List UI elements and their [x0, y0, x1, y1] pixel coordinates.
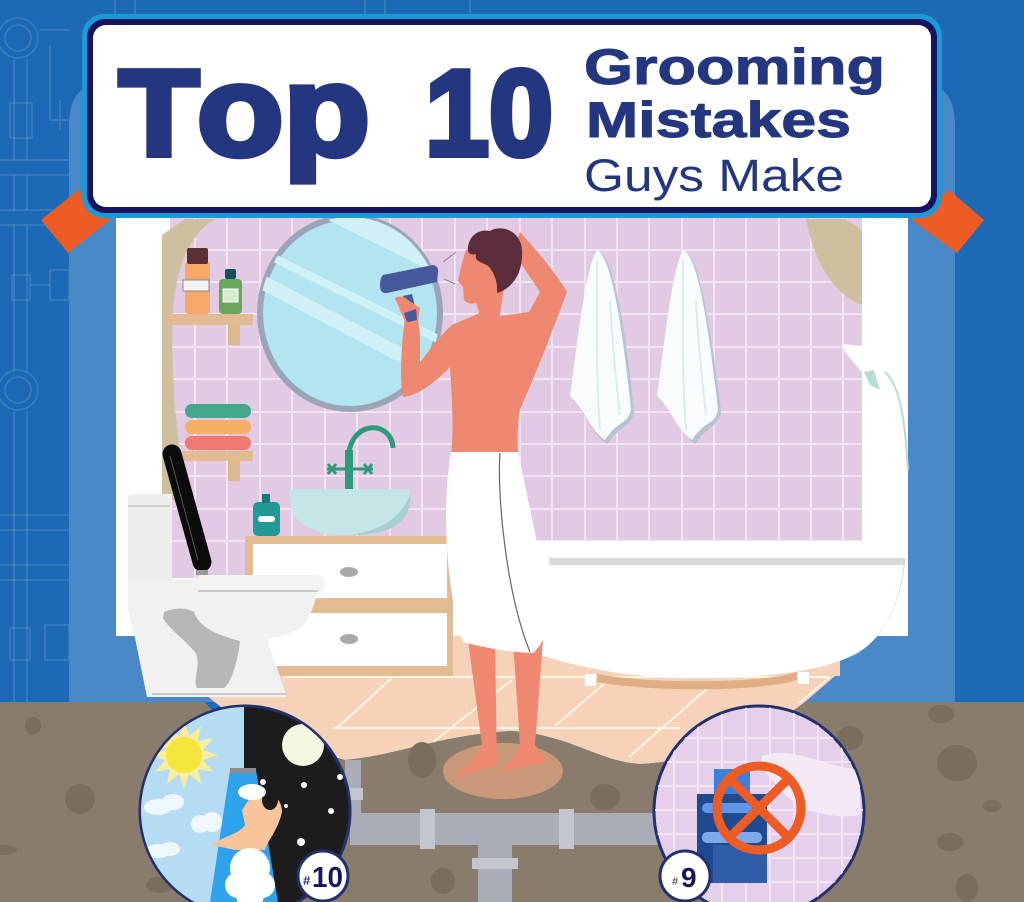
tiled wall	[170, 215, 862, 580]
icon: prohibited sign	[717, 766, 801, 850]
sink and faucet	[290, 428, 410, 535]
bath mat	[443, 743, 563, 799]
floor tile lines	[283, 677, 830, 757]
legs	[452, 640, 548, 778]
title: top 10: op	[197, 40, 370, 183]
man with hair dryer	[380, 228, 567, 799]
shower figure	[210, 768, 282, 902]
icon: moon	[282, 724, 324, 766]
torso and arms	[401, 232, 567, 455]
lighter wall band	[69, 85, 955, 702]
round mirror	[258, 205, 440, 409]
ground stones	[0, 705, 1001, 902]
badge: 9: #	[672, 876, 678, 888]
soap dispenser	[253, 494, 280, 536]
icon: sun	[155, 726, 218, 789]
title: top 10: 10	[425, 45, 553, 181]
panel: mistake 10	[140, 706, 350, 902]
face	[458, 245, 505, 315]
toilet	[128, 494, 325, 697]
towel	[446, 452, 548, 653]
title: top 10	[119, 40, 553, 183]
title: top 10: T	[119, 45, 199, 181]
floor	[190, 636, 840, 764]
ground	[0, 702, 1024, 902]
panel: window dressing title diamonds	[41, 190, 984, 253]
shelf with bottles	[168, 248, 253, 345]
icon: stars	[260, 774, 343, 846]
title: guys make: Guys Make	[584, 150, 844, 201]
vanity cabinet	[245, 536, 453, 676]
black brush handle	[170, 454, 208, 575]
title: grooming: Grooming	[584, 39, 885, 95]
left curtain	[162, 219, 215, 500]
icon: clouds	[144, 794, 222, 858]
blueprint pipes pattern	[0, 0, 470, 702]
title panel	[82, 14, 942, 218]
hanging towels	[570, 250, 721, 444]
right curtain	[806, 219, 862, 305]
window white panel	[116, 200, 908, 636]
badge: 9	[660, 851, 710, 901]
folded towels shelf	[180, 404, 253, 481]
badge: 10: #	[303, 873, 311, 888]
hair dryer	[380, 252, 456, 322]
title: mistakes: Mistakes	[586, 92, 851, 148]
steam	[762, 753, 860, 816]
icon: blue product box	[697, 769, 767, 883]
badge: 10	[298, 851, 348, 901]
panel: mistake 9	[650, 706, 870, 902]
badge: 9: 9	[681, 862, 697, 893]
badge: 10: 10	[312, 862, 343, 894]
drain pipes	[345, 760, 660, 902]
hair	[468, 228, 522, 293]
bathtub	[530, 344, 908, 689]
